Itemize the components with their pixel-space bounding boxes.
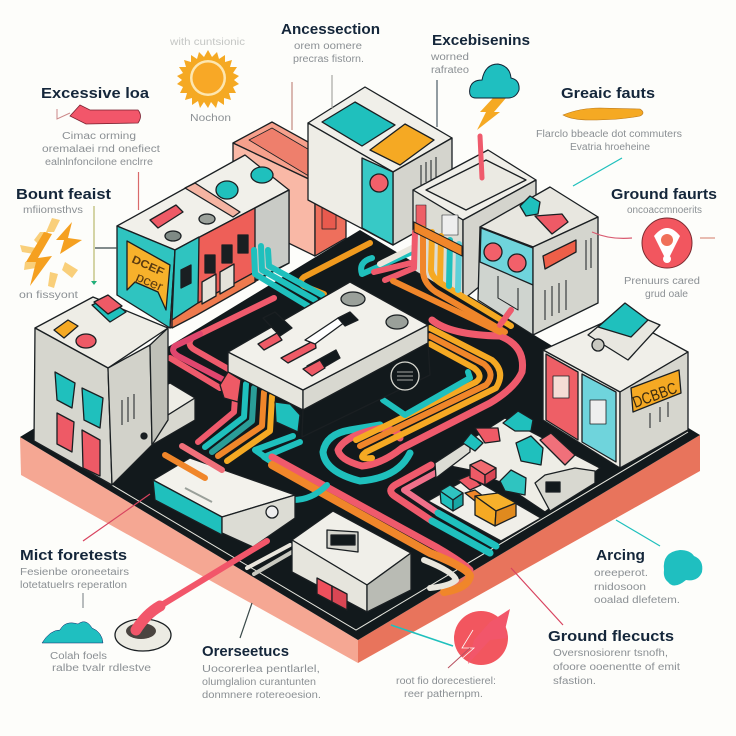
text: orerseetucs body (202, 664, 321, 701)
text: ground flecucts body: Oversnosiorenr tsnofh, (553, 648, 668, 659)
small rear grey box (152, 383, 195, 445)
heading: great faults: Greaic fauts (561, 85, 655, 102)
callout line: great faults (573, 158, 622, 186)
text: great faults body: Evatria hroeheine (570, 142, 650, 153)
cable: pink from tower up (480, 136, 482, 178)
icon: sun (177, 50, 239, 108)
breaker: right unit with yellow label (543, 303, 688, 468)
heading: ancessection: Ancessection (281, 21, 380, 38)
text: arcing body: rnidosoon (594, 582, 646, 593)
callout line: bount feaist (91, 206, 97, 285)
text: ground faults note: grud oale (645, 289, 688, 300)
breaker: white tower with pink cable (413, 150, 536, 300)
wires: right lower pink and teal (247, 465, 496, 574)
callout line: red bolt (391, 625, 453, 646)
text: arcing body: ooalad dlefetem. (594, 595, 680, 606)
text: mict forets body: Fesienbe oroneetairs (20, 567, 129, 578)
callout line: overseetucs (240, 603, 252, 638)
heading: arcing: Arcing (596, 547, 645, 564)
text: orerseetucs body: Uocorerlea pentlarlel, (202, 664, 320, 675)
text: bolt caption (396, 676, 496, 700)
text: mict forets body (20, 567, 129, 591)
callout line: excebisenins (436, 80, 438, 127)
callout line: arcing (616, 520, 660, 546)
callout line: ground flecucts (511, 568, 563, 625)
breaker: left front unit (34, 295, 168, 485)
text: ground faults note: Prenuurs cared (624, 276, 700, 287)
breaker: salmon back unit (233, 122, 346, 256)
text: excebisenins body: rafrateo (431, 65, 469, 76)
callout line: anesection left (291, 82, 293, 130)
breaker: grey unit with red indicators (478, 187, 598, 335)
text: excessive load body: Cimac orming (62, 131, 136, 142)
heading: mict forets: Mict foretests (20, 547, 127, 564)
icon: red bolt circle (448, 609, 510, 668)
icon: orange blade (563, 108, 643, 120)
text: excebisenins body: worned (430, 52, 469, 63)
heading: orerseetucs: Orerseetucs (202, 643, 289, 660)
callout line: cloud (82, 593, 84, 608)
text: great faults body (536, 129, 682, 153)
text: ground faults sub: oncoaccmnoerits (627, 205, 702, 216)
text: excessive load body: ealnlnfoncilone enclrre (45, 157, 153, 168)
heading: excessive load: Excessive loa (41, 85, 150, 102)
text: cloud caption: ralbe tvalr rdlestve (52, 663, 152, 674)
text: excebisenins body (430, 52, 469, 76)
text: cloud caption: Colah foels (50, 651, 107, 662)
icon: cloud with bolt (470, 64, 519, 130)
text: ground flecucts body (553, 648, 680, 687)
callout line: ground faults left (592, 232, 632, 238)
heading: excebisenins: Excebisenins (432, 32, 530, 49)
callout line: mict forets (83, 494, 150, 541)
breaker: white unit with teal and yellow switches (308, 87, 452, 245)
text: arcing body (594, 568, 680, 606)
text: mict forets body: lotetatuelrs reperatlon (20, 580, 127, 591)
text: ancessection body: precras fistorn. (293, 54, 364, 65)
orange strap on tower (414, 222, 462, 256)
text: orerseetucs body: donmnere rotereoesion. (202, 690, 321, 701)
breaker: bottom-left long unit (153, 446, 295, 547)
wires: orange upper (301, 243, 416, 294)
breaker: top-left unit with teal face and yellow label: DCEF (130, 254, 166, 279)
icon: red warning circle (642, 218, 692, 268)
text: orerseetucs body: olumglalion curantunten (202, 677, 316, 688)
wires: upper teal bundle (254, 246, 322, 306)
icon: teal blob (664, 550, 702, 586)
breaker: top-left unit with teal face and yellow label: pcer (134, 269, 166, 294)
text: ground faults note (624, 276, 700, 300)
text: bolt caption: reer pathernpm. (404, 689, 483, 700)
text: ground flecucts body: sfastion. (553, 676, 596, 687)
wires: long lower band (272, 457, 470, 592)
callout line: bount to unit (95, 247, 118, 249)
callout line: ground faults right (700, 237, 715, 239)
callout line: anesection right (331, 75, 333, 108)
text: cloud caption (50, 651, 152, 674)
central breaker (220, 282, 430, 437)
wires: large central loop (323, 320, 523, 481)
small component cluster (428, 411, 600, 541)
heading: bount feaist: Bount feaist (16, 186, 111, 203)
text: excessive load body: oremalaei rnd onefiect (42, 144, 160, 155)
label: nochon: Nochon (190, 113, 231, 124)
label: with cuntsionic: with cuntsionic (169, 37, 245, 48)
icon: red pointer (57, 105, 140, 124)
breaker: top-left unit with teal face and yellow label (117, 155, 289, 328)
wires: draped over tower face (385, 228, 511, 332)
text: ancessection body (293, 41, 364, 65)
text: bolt caption: root fio dorecestierel: (396, 676, 496, 687)
breaker: right unit with yellow label: DCBBC (631, 380, 680, 412)
heading: ground faults: Ground faurts (611, 186, 717, 203)
heading: ground flecucts: Ground flecucts (548, 628, 674, 645)
callout line: excessive load (138, 172, 140, 210)
breaker: bottom-centre unit (292, 511, 411, 612)
text: great faults body: Flarclo bbeacle dot commuters (536, 129, 682, 140)
text: excessive load body (42, 131, 160, 168)
icon: teal cloud (42, 622, 103, 643)
icon: red cable into ring (115, 541, 267, 651)
icon: lightning burst (20, 218, 82, 288)
platform base (20, 230, 700, 663)
text: arcing body: oreeperot. (594, 568, 648, 579)
wires: pink left bundle (170, 298, 274, 388)
text: bount feaist body: mfiiomsthvs (23, 205, 83, 216)
text: bount feaist note: on fissyont (19, 290, 78, 301)
wires: down-left multicolour bundle (198, 384, 300, 466)
text: ancessection body: orem oomere (294, 41, 363, 52)
text: ground flecucts body: ofoore ooenentte of emit (553, 662, 680, 673)
